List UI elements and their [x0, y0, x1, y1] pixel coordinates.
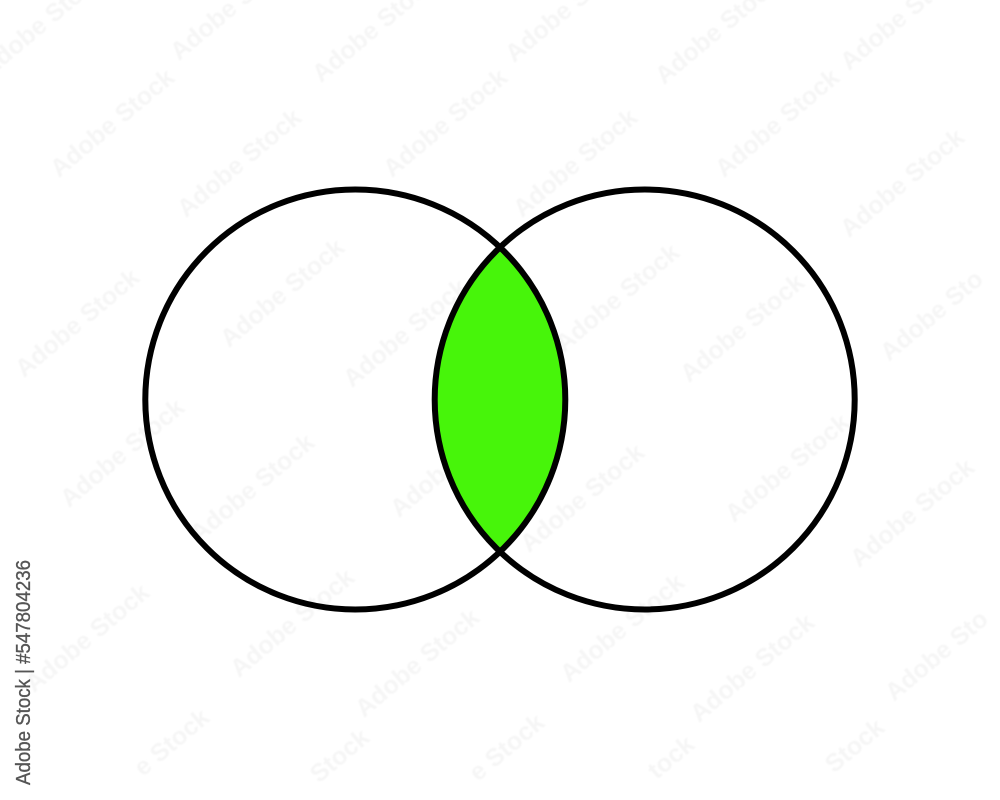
- background watermarks: Adobe Sto: [875, 265, 989, 367]
- background watermarks: Stock: [820, 713, 890, 778]
- background watermarks: e Stock: [464, 708, 550, 787]
- background watermarks: Adobe Stock: [385, 403, 520, 523]
- background watermarks: Adobe Stock: [555, 568, 690, 688]
- background watermarks: Adobe Stock: [215, 233, 350, 353]
- background watermarks: Adobe Stock: [508, 103, 643, 223]
- background watermarks: tock: [642, 730, 700, 785]
- background watermarks: Adobe Stock: [338, 273, 473, 393]
- background watermarks: Adobe Stock: [845, 453, 980, 573]
- right circle: [435, 190, 855, 610]
- background watermarks: Stock: [305, 723, 375, 788]
- background watermarks: Adobe Stock: [225, 563, 360, 683]
- background watermarks: e Stock: [129, 703, 215, 782]
- background watermarks: Adobe Stock: [378, 63, 513, 183]
- background watermarks: Adobe Stock: [10, 263, 145, 383]
- background watermarks: Adobe Stock: [172, 103, 307, 223]
- background watermarks: Adobe Stock: [45, 63, 180, 183]
- background watermarks: Adobe Stock: [550, 238, 685, 358]
- background watermarks: Adobe Stock: [350, 603, 485, 723]
- background watermarks: Adobe Stock: [710, 63, 845, 183]
- background watermarks: Adobe Sto: [880, 605, 994, 707]
- background watermarks: Adobe Stock: [685, 608, 820, 728]
- background watermarks: Adobe Stock: [835, 123, 970, 243]
- intersection: green lens: [435, 247, 565, 552]
- background watermarks: Adobe Stock: [20, 578, 155, 698]
- vertical credit text: Adobe Stock | #547804236: [13, 560, 35, 785]
- background watermarks: Adobe Stock: [720, 408, 855, 528]
- background watermarks: Adobe Stock: [515, 438, 650, 558]
- left circle: [145, 190, 565, 610]
- background watermarks: Adobe Stock: [185, 428, 320, 548]
- background watermarks: Adobe Stock: [675, 268, 810, 388]
- background watermarks: Adobe Stock: [55, 393, 190, 513]
